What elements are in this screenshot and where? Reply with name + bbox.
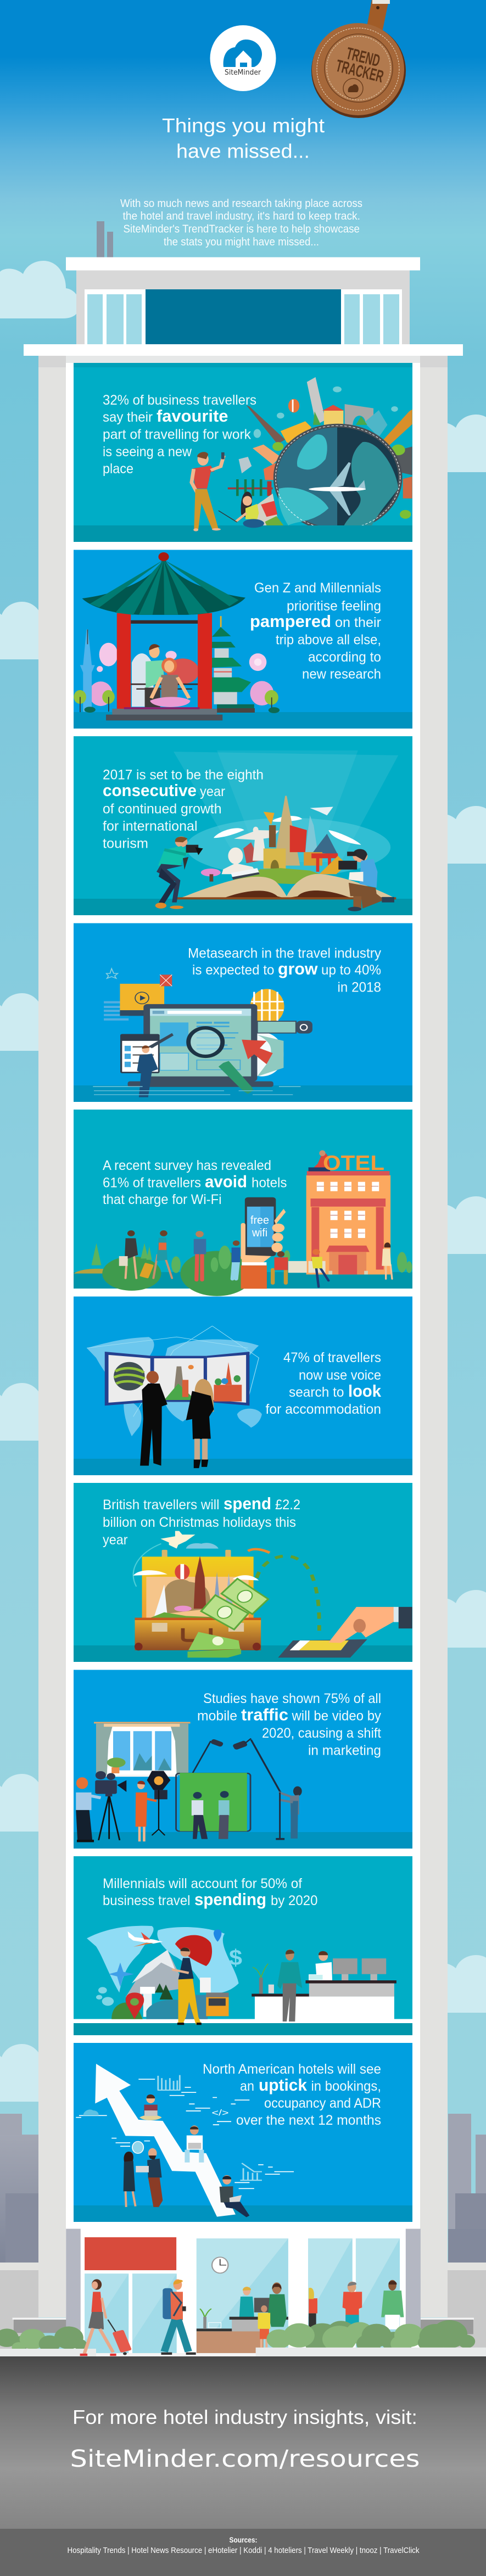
text: spend: year: [103, 1532, 127, 1548]
title: [162, 114, 325, 163]
text: favourite: is seeing a new: [103, 444, 192, 460]
text: avoid: 61% of travellers: [103, 1175, 201, 1190]
leather luggage tag: TRACKER: [334, 56, 386, 86]
text: grow: Metasearch in the travel industry: [188, 945, 381, 961]
panel 6: voice search: [74, 1297, 412, 1475]
text: free wifi: wifi: [252, 1227, 267, 1239]
text: uptick: an: [240, 2079, 254, 2094]
text: HOTEL sign: OTEL: [323, 1152, 384, 1175]
sources bar: Hospitality Trends | Hotel News Resource | eHotelier | Koddi | 4 hoteliers | Travel Weekly | tnooz | TravelClick: [67, 2546, 420, 2555]
text: grow: is expected to: [192, 962, 275, 978]
sources bar: Sources:: [230, 2535, 257, 2544]
text: traffic: 2020, causing a shift: [262, 1726, 381, 1741]
text: look: search to: [289, 1385, 344, 1400]
text: look: [266, 1350, 382, 1417]
text: spend: billion on Christmas holidays this: [103, 1515, 296, 1530]
backpacker: [161, 2279, 196, 2354]
text: traffic: Studies have shown 75% of all: [203, 1691, 381, 1706]
cloud: [0, 2044, 58, 2102]
text: grow: grow: [278, 959, 318, 978]
text: pampered: new research: [302, 667, 381, 682]
illustration: upward arrow and workers: [76, 2064, 294, 2217]
text: uptick: over the next 12 months: [236, 2113, 381, 2128]
text: traffic: in marketing: [308, 1743, 381, 1758]
hotel entrance and lobby scene: [0, 2229, 486, 2356]
text: spend: [103, 1494, 300, 1548]
cloud: [433, 1955, 486, 2013]
title: have missed...: [176, 139, 310, 163]
red sign: [85, 2237, 176, 2270]
cloud: [433, 1196, 486, 1254]
cloud: [0, 602, 58, 659]
cloud: [433, 415, 486, 472]
text: traffic: will be video by: [292, 1709, 381, 1724]
text: free wifi: [250, 1214, 269, 1239]
text: spending: spending: [194, 1890, 266, 1909]
text: uptick: uptick: [259, 2075, 308, 2095]
illustration: pavilion and couple: [74, 552, 280, 720]
panel 2: Gen Z and Millennials: [74, 550, 412, 729]
text: spend: British travellers will: [103, 1497, 220, 1513]
panel 4: metasearch: [74, 923, 412, 1102]
illustration: globe and landmarks: [192, 377, 413, 531]
background city buildings: [0, 2114, 486, 2353]
text: dollar sign: $: [229, 1946, 242, 1970]
text: look: look: [348, 1381, 382, 1401]
bushes: [0, 2320, 475, 2355]
cloud: [433, 806, 486, 864]
illustration: upward arrow and workers: </>: [211, 2108, 228, 2118]
text: avoid: avoid: [205, 1172, 247, 1191]
title: Things you might: [162, 114, 325, 137]
intro paragraph: [120, 198, 362, 248]
cloud: [0, 993, 58, 1051]
text: spend: £2.2: [275, 1497, 300, 1513]
panel 1: business travellers: [74, 363, 413, 542]
logo badge: [210, 25, 276, 91]
text: favourite: 32% of business travellers: [103, 393, 256, 408]
text: uptick: occupancy and ADR: [264, 2096, 381, 2111]
text: pampered: on their: [335, 615, 381, 630]
illustration: suitcase, money and tablet: [133, 1531, 412, 1657]
text: traffic: [197, 1691, 381, 1758]
reception desk: [197, 2287, 288, 2353]
text: favourite: favourite: [157, 406, 228, 425]
text: consecutive: tourism: [103, 836, 148, 851]
text: consecutive: [103, 768, 264, 851]
panel 9: business travel spending: [74, 1856, 412, 2035]
text: consecutive: year: [200, 784, 225, 799]
text: uptick: in bookings,: [311, 2079, 381, 2094]
text: free wifi: free: [250, 1214, 269, 1227]
text: favourite: say their: [103, 410, 153, 425]
text: look: now use voice: [299, 1368, 381, 1383]
intro paragraph: the hotel and travel industry, it's hard to keep track.: [123, 210, 360, 222]
text: pampered: trip above all else,: [276, 632, 381, 648]
text: pampered: according to: [308, 649, 381, 665]
ground kerbs: [0, 2348, 486, 2356]
text: spending: by 2020: [271, 1893, 317, 1908]
text: pampered: [250, 580, 381, 682]
text: pampered: prioritise feeling: [287, 598, 381, 614]
panel 8: mobile video traffic: [74, 1670, 412, 1849]
text: pampered: Gen Z and Millennials: [254, 580, 381, 596]
leather luggage tag: TREND: [344, 43, 382, 70]
text: traffic: traffic: [241, 1705, 288, 1724]
cloud: [0, 1774, 58, 1832]
text: visit prompt: For more hotel industry insights, visit:: [72, 2406, 417, 2428]
leather luggage tag: [311, 0, 406, 118]
text: spending: Millennials will account for 50% of: [103, 1876, 302, 1891]
text: avoid: [103, 1158, 287, 1207]
illustration: film crew: [76, 1722, 302, 1842]
hotel body columns: [38, 356, 448, 2355]
text: consecutive: 2017 is set to be the eighth: [103, 768, 264, 783]
footer call to action: [0, 2356, 486, 2529]
sources bar: [0, 2529, 486, 2576]
illustration: world map and display boards: [87, 1326, 262, 1468]
text: avoid: A recent survey has revealed: [103, 1158, 271, 1173]
text: favourite: part of travelling for work: [103, 427, 251, 442]
text: favourite: place: [103, 461, 133, 477]
panel 7: Christmas holidays: [74, 1483, 412, 1662]
illustration: laptop and magnifying glass: [93, 968, 312, 1097]
text: website address: SiteMinder.com/resources: [70, 2445, 420, 2473]
text: consecutive: for international: [103, 819, 198, 834]
text: avoid: that charge for Wi-Fi: [103, 1192, 222, 1207]
panel 10: North American hotels: [74, 2043, 412, 2222]
icon: wall clock: [212, 2257, 228, 2273]
panel 5: Wi-Fi survey: [74, 1110, 412, 1296]
intro paragraph: With so much news and research taking place across: [120, 198, 362, 210]
woman with suitcase: [80, 2279, 132, 2355]
text: uptick: [203, 2062, 381, 2128]
text: favourite: [103, 393, 256, 477]
illustration: traveller and reception desk: [87, 1926, 396, 2024]
illustration: hotel, phone and people: [74, 1150, 412, 1296]
text: grow: up to 40%: [321, 962, 381, 978]
cloud: [0, 1383, 58, 1441]
text: uptick: North American hotels will see: [203, 2062, 381, 2077]
text: look: for accommodation: [266, 1402, 381, 1417]
panel 3: international tourism: [74, 736, 412, 915]
text: consecutive: consecutive: [103, 781, 197, 800]
text: spending: [103, 1876, 317, 1909]
text: consecutive: of continued growth: [103, 802, 222, 817]
hotel top storey: [24, 221, 463, 356]
text: grow: [188, 945, 381, 995]
text: spend: spend: [224, 1494, 271, 1513]
text: spending: business travel: [103, 1893, 190, 1908]
cloud: [433, 1590, 486, 1648]
text: look: 47% of travellers: [283, 1350, 381, 1365]
text: avoid: hotels: [252, 1175, 287, 1190]
guests in the lobby: [258, 2280, 404, 2348]
intro paragraph: SiteMinder's TrendTracker is here to help showcase: [123, 223, 360, 235]
glass doors and windows: [85, 2238, 400, 2354]
text: grow: in 2018: [337, 979, 381, 995]
text: pampered: pampered: [250, 612, 331, 631]
intro paragraph: the stats you might have missed...: [164, 236, 319, 248]
logo badge: SiteMinder: [225, 69, 261, 77]
cloud: [0, 261, 80, 318]
illustration: open book with landmarks: [155, 751, 398, 911]
text: traffic: mobile: [197, 1709, 237, 1724]
